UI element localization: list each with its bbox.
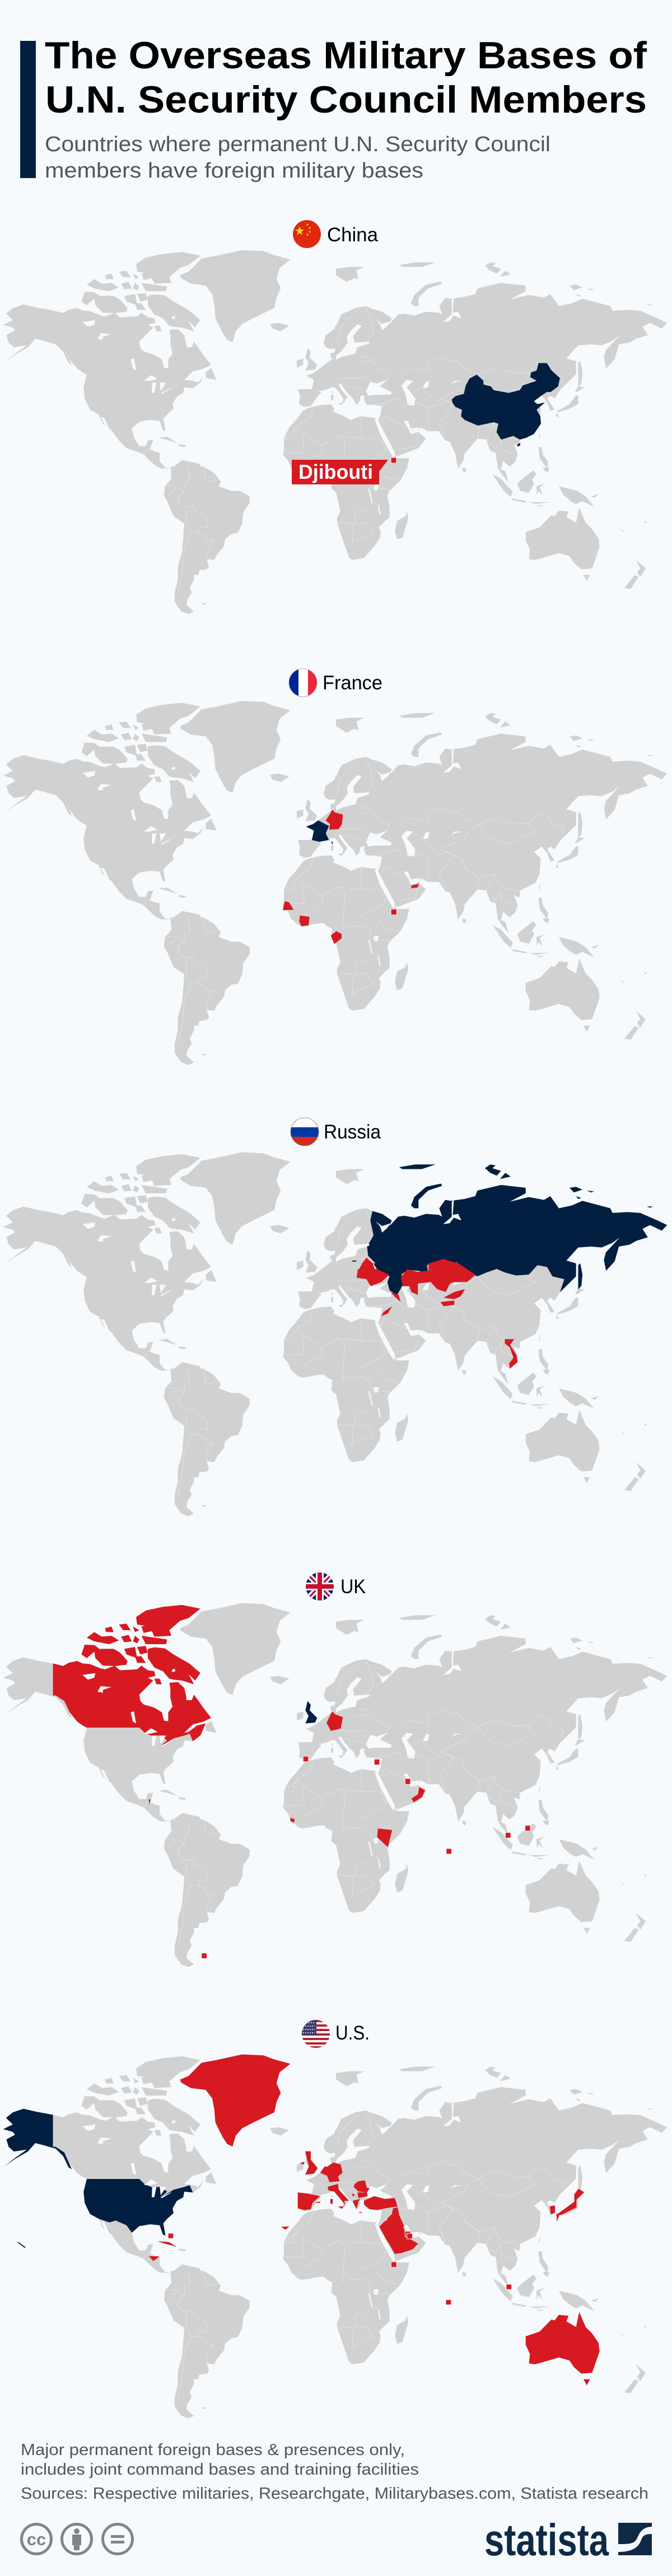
subtitle [45,133,550,183]
country: U.S. highlighted [3,2055,600,2386]
map: world base [3,1603,667,1967]
base marker and callout: Djibouti: Djibouti [298,460,373,483]
icon: creative commons [21,2524,52,2554]
bases and red countries [149,1711,530,1958]
label: France flag and name [289,669,382,697]
base marker and callout: Djibouti [292,458,396,484]
title: The Overseas Military Bases of [45,34,647,77]
footnote: includes joint command bases and training facilities [21,2461,419,2479]
panel: China [3,220,667,614]
icon: attribution [62,2524,92,2554]
countries with U.S. bases: other regions [149,2188,584,2305]
country: Russia highlighted [336,1164,667,1360]
footnote [21,2441,419,2479]
footnote: Major permanent foreign bases & presences only, [21,2441,405,2459]
title [45,34,647,121]
label: China flag and name [293,220,379,248]
Hawaii [18,2242,26,2248]
panel: France [3,669,667,1065]
sources: Sources: Respective militaries, Researchgate, Militarybases.com, Statista research [21,2485,648,2503]
label: U.S. flag and name [302,2020,370,2048]
title: U.N. Security Council Members [45,78,647,121]
icon: creative commons: cc [27,2530,46,2549]
country: China highlighted [452,363,560,446]
panel: UK [3,1572,667,1967]
label: Russia flag and name: Russia [324,1121,381,1143]
subtitle: members have foreign military bases [45,159,423,183]
logo: statista: statista [484,2515,609,2565]
countries with French bases [283,810,419,944]
countries with U.S. bases: Europe and Middle East [281,2152,418,2267]
label: UK flag and name [306,1572,366,1600]
countries with Russian bases [352,1258,517,1369]
subtitle: Countries where permanent U.N. Security Council [45,133,550,156]
header accent bar [20,41,36,178]
label: Russia flag and name [291,1118,381,1146]
countries with UK bases [53,1605,317,1747]
map: world base [3,250,667,614]
label: China flag and name: China [327,224,379,246]
panel: Russia [3,1118,667,1516]
country: France highlighted [306,820,333,844]
icon: no derivatives [103,2524,132,2554]
map: world base [3,2055,667,2419]
map: world base [3,1152,667,1516]
label: U.S. flag and name: U.S. [335,2022,370,2044]
panel: U.S. [3,2020,667,2419]
map: world base [3,701,667,1065]
label: France flag and name: France [323,672,382,694]
label: UK flag and name: UK [340,1576,366,1598]
